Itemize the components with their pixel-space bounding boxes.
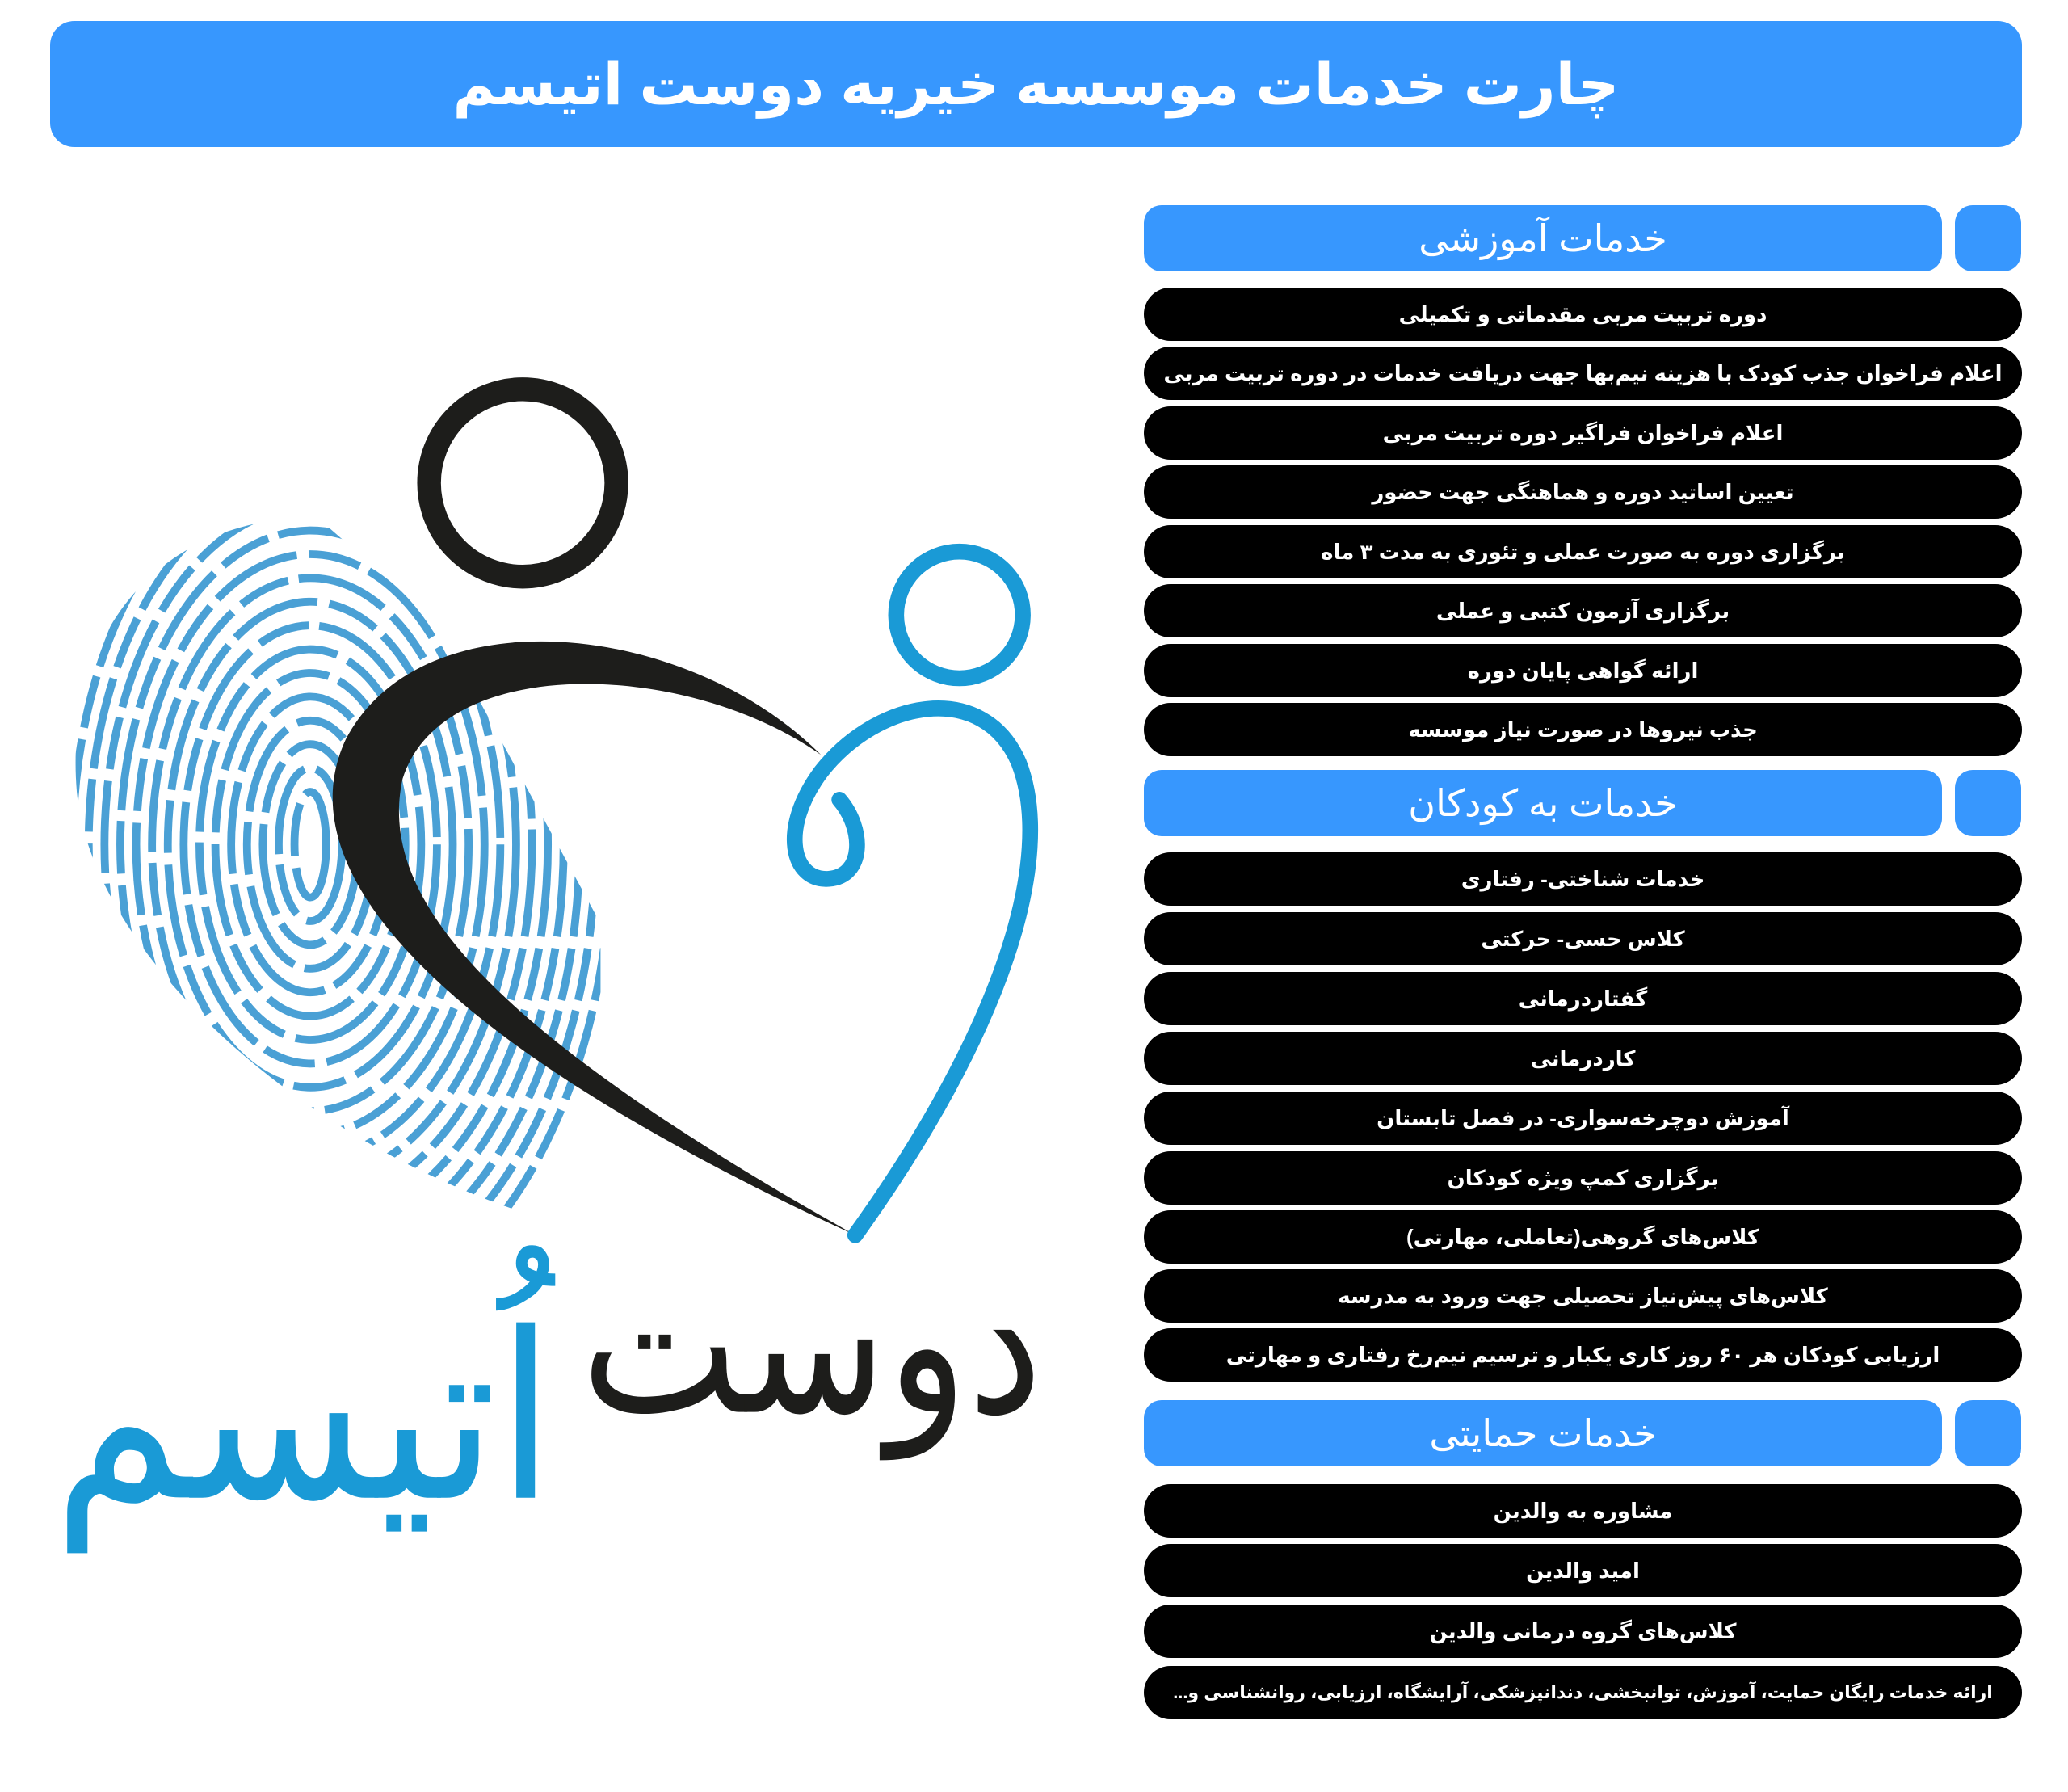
heading: support services: [1144, 1400, 1942, 1466]
item: [1144, 525, 2022, 578]
item: ارزیابی کودکان هر ۶۰ روز کاری یکبار و ترسیم نیم‌رخ رفتاری و مهارتی: [1226, 1343, 1940, 1367]
icon: fingerprint: [76, 524, 601, 1209]
item: [1144, 465, 2022, 519]
item: [1144, 703, 2022, 756]
item: تعیین اساتید دوره و هماهنگی جهت حضور: [1372, 480, 1794, 504]
item: آموزش دوچرخه‌سواری- در فصل تابستان: [1377, 1105, 1789, 1129]
icon: blue head ring: [896, 552, 1023, 679]
item: [1144, 1328, 2022, 1382]
item: مشاوره به والدین: [1494, 1498, 1672, 1522]
title: [50, 21, 2022, 147]
item: [1144, 1210, 2022, 1264]
item: کلاس‌های پیش‌نیاز تحصیلی جهت ورود به مدرسه: [1338, 1283, 1828, 1307]
item: [1144, 972, 2022, 1025]
text: logo word black: دوست: [581, 1229, 1043, 1462]
icon: black heart stroke: [333, 642, 855, 1235]
item: [1144, 584, 2022, 637]
item: ارائه خدمات رایگان حمایت، آموزش، توانبخشی، دندانپزشکی، آرایشگاه، ارزیابی، روانشناسی و...: [1173, 1682, 1993, 1702]
item: [1144, 1032, 2022, 1085]
item: خدمات شناختی- رفتاری: [1461, 866, 1704, 890]
logo: [67, 377, 1039, 1553]
icon: blue heart stroke: [795, 709, 1030, 1235]
item: کلاس‌های گروهی(تعاملی، مهارتی): [1406, 1225, 1759, 1249]
item: [1144, 912, 2022, 965]
title: چارت خدمات موسسه خیریه دوست اتیسم: [453, 53, 1619, 117]
icon: black head ring: [429, 389, 616, 577]
heading: educational: [1144, 205, 1942, 271]
item: دوره تربیت مربی مقدماتی و تکمیلی: [1399, 302, 1767, 326]
heading: children services: [1144, 770, 1942, 836]
item: امید والدین: [1526, 1558, 1640, 1582]
item: جذب نیروها در صورت نیاز موسسه: [1408, 717, 1758, 742]
item: گفتاردرمانی: [1519, 986, 1647, 1010]
item: برگزاری دوره به صورت عملی و تئوری به مدت ۳ ماه: [1321, 540, 1845, 564]
item: [1144, 347, 2022, 400]
item: برگزاری کمپ ویژه کودکان: [1448, 1165, 1718, 1189]
item: کلاس‌های گروه درمانی والدین: [1429, 1619, 1737, 1643]
item: کاردرمانی: [1530, 1045, 1636, 1070]
heading: children services: خدمات به کودکان: [1408, 782, 1678, 824]
item: برگزاری آزمون کتبی و عملی: [1436, 598, 1730, 622]
item: [1144, 1484, 2022, 1538]
item: [1144, 406, 2022, 460]
item: اعلام فراخوان جذب کودک با هزینه نیم‌بها جهت دریافت خدمات در دوره تربیت مربی: [1163, 360, 2003, 385]
item: [1144, 1544, 2022, 1597]
heading: support services: خدمات حمایتی: [1429, 1412, 1657, 1454]
item: [1144, 1092, 2022, 1145]
item: کلاس حسی- حرکتی: [1481, 926, 1685, 950]
item: [1144, 852, 2022, 906]
item: اعلام فراخوان فراگیر دوره تربیت مربی: [1383, 420, 1783, 444]
item: ارائه گواهی پایان دوره: [1468, 658, 1698, 682]
item: [1144, 288, 2022, 341]
text: logo word blue: اُتیسم: [53, 1245, 558, 1555]
item: [1144, 1605, 2022, 1658]
heading: educational: خدمات آموزشی: [1419, 217, 1667, 259]
item: [1144, 1151, 2022, 1205]
item: [1144, 1666, 2022, 1719]
item: [1144, 644, 2022, 697]
item: [1144, 1269, 2022, 1323]
